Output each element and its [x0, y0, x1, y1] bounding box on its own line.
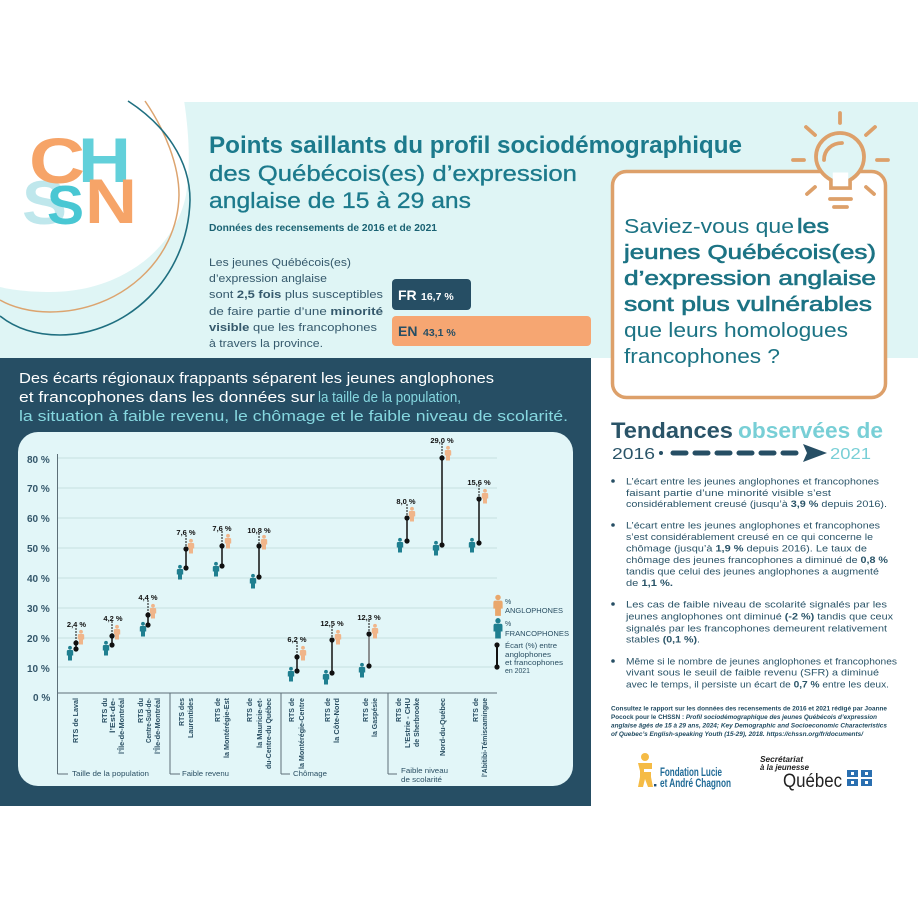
- logo: Secrétariat à la jeunesse Québec: Secrétariat: [760, 754, 804, 764]
- heading: regional gaps: la taille de la population,: [318, 390, 461, 406]
- bullet: low education: stables (0,1 %) .: [626, 634, 700, 646]
- text block: visible minority: visible que les francophones: [209, 322, 378, 334]
- x axis region labels: Laurentides: [186, 698, 195, 738]
- gridlines and y axis: 50 %: [27, 544, 50, 555]
- logo: CHSSN: N: [85, 167, 137, 237]
- bar: FR 16,7 %: FR: [398, 287, 417, 303]
- x axis region labels: RTS de: [245, 698, 254, 722]
- title: anglaise de 15 à 29 ans: [209, 188, 471, 213]
- text block: visible minority: de faire partie d’une minorité: [209, 306, 383, 318]
- legend: %: [505, 599, 511, 606]
- arrow: 2016 to 2021: 2021: [830, 446, 871, 463]
- data: RTS de l'Est-de-l'Île-de-Montréal: [103, 614, 123, 656]
- bullet: low education: jeunes anglophones ont diminué (-2 %) tandis que ceux: [625, 612, 893, 622]
- callout text: que leurs homologues: [624, 320, 848, 342]
- x axis region labels: l’Abitibi-Témiscamingue: [480, 698, 489, 777]
- logo: Secrétariat à la jeunesse Québec: à la jeunesse: [760, 762, 809, 772]
- x axis region labels: du-Centre-du Québec: [264, 698, 273, 769]
- x axis region labels: l’Île-de-Montréal: [153, 698, 162, 754]
- data: RTS de l'Estrie - CHU de Sherbrooke: 8,0 %: [396, 497, 416, 506]
- x axis region labels: la Gaspésie: [370, 698, 379, 737]
- data: RTS de la Côte-Nord: 12,5 %: [320, 619, 344, 628]
- x axis region labels: de Sherbrooke: [412, 698, 421, 747]
- x axis region labels: RTS de: [361, 698, 370, 722]
- gridlines and y axis: 20 %: [27, 634, 50, 645]
- bullet: unemployment: [611, 520, 889, 589]
- arrow: 2016 to 2021: 2016: [612, 446, 655, 463]
- logo: CHSSN: C: [29, 125, 85, 197]
- citation: of Quebec’s English-speaking Youth (15-29), 2018. https://chssn.org/fr/documents/: [611, 731, 864, 738]
- text block: visible minority: d’expression anglaise: [209, 273, 327, 285]
- logo: CHSSN: [22, 125, 137, 238]
- text block: trends bullets: [611, 476, 897, 690]
- heading: regional gaps: [19, 371, 568, 425]
- data: RTS de la Montérégie-Est: 7,6 %: [212, 524, 232, 533]
- bar: EN 43,1 %: EN: [398, 323, 417, 339]
- logo: Fondation Lucie et André Chagnon: [638, 753, 731, 790]
- callout: did you know: [612, 113, 888, 398]
- data: RTS de Laval: [67, 620, 86, 660]
- bullet: low education: Les cas de faible niveau de scolarité signalés par les: [626, 600, 887, 610]
- logo: CHSSN: H: [78, 126, 131, 196]
- bullet: visible minority: L’écart entre les jeunes anglophones et francophones: [626, 476, 879, 488]
- heading: regional gaps: Des écarts régionaux frappants séparent les jeunes anglophones: [19, 371, 494, 387]
- title: des Québécois(es) d’expression: [209, 161, 577, 186]
- x axis region labels: RTS du: [100, 698, 109, 723]
- legend: ANGLOPHONES: [505, 606, 563, 615]
- bar: FR 16,7 %: 16,7 %: [421, 291, 454, 303]
- x axis region labels: L’Estrie - CHU: [403, 698, 412, 748]
- heading: trends: observées de: [738, 418, 883, 443]
- data: RTS des Laurentides: 7,6 %: [176, 528, 196, 537]
- bullet: visible minority: considérablement creusé (jusqu’à 3,9 % depuis 2016).: [626, 499, 887, 510]
- data: RTS du Centre-Sud-de-l'Île-de-Montréal: [138, 593, 158, 636]
- heading: trends: Tendances: [611, 418, 733, 443]
- subtitle: census data: Données des recensements de 2016 et de 2021: [209, 223, 437, 234]
- callout text: [623, 216, 876, 368]
- x axis group labels: Faible revenu: [182, 769, 229, 778]
- x axis region labels: RTS de: [213, 698, 222, 722]
- title: Points saillants du profil sociodémographique: [209, 132, 742, 159]
- data: RTS de la Montérégie-Centre: [287, 635, 307, 682]
- gridlines and y axis: 70 %: [27, 484, 50, 495]
- gridlines and y axis: 40 %: [27, 574, 50, 585]
- panel: regional gaps: [0, 358, 591, 806]
- x axis region labels: RTS du: [136, 698, 145, 723]
- callout text: jeunes Québécois(es): [623, 242, 876, 264]
- legend: en 2021: [505, 668, 530, 675]
- data: RTS de la Mauricie-et-du-Centre-du Québec: [247, 526, 271, 588]
- data: RTS de la Mauricie-et-du-Centre-du Québec: 10,8 %: [247, 526, 271, 535]
- bullet: unemployment: tandis que celui des jeunes anglophones a augmenté: [626, 566, 879, 578]
- x axis region labels: la Montérégie-Centre: [297, 698, 306, 769]
- x axis region labels: la Montérégie-Est: [222, 698, 231, 758]
- legend: FRANCOPHONES: [505, 629, 569, 638]
- heading: regional gaps: et francophones dans les données sur: [19, 390, 315, 406]
- legend: Écart (%) entre: [505, 641, 557, 650]
- data: RTS du Centre-Sud-de-l'Île-de-Montréal: 4,4 %: [138, 593, 158, 602]
- callout text: sont plus vulnérables: [624, 294, 872, 316]
- bullet: unemployment: chômage des jeunes francophones a diminué de 0,8 %: [626, 555, 889, 566]
- text block: visible minority: à travers la province.: [209, 338, 323, 350]
- data: RTS de la Montérégie-Est: [212, 524, 232, 576]
- bullet: low education: signalés par les francophones demeurent relativement: [626, 624, 887, 634]
- x axis region labels: RTS de: [287, 698, 296, 722]
- bullet: unemployment: chômage (jusqu’à 1,9 % depuis 2016). Le taux de: [626, 544, 867, 554]
- bullet: unemployment: de 1,1 %.: [626, 578, 673, 589]
- bullet: low income: Même si le nombre de jeunes anglophones et francophones: [626, 656, 897, 668]
- heading: regional gaps: la situation à faible revenu, le chômage et le faible niveau de scolarité.: [19, 409, 568, 425]
- x axis region labels: Centre-Sud-de-: [144, 698, 153, 743]
- data: RTS des Laurentides: [176, 528, 196, 580]
- bullet: low income: vivant sous le seuil de faible revenu (SFR) a diminué: [626, 668, 879, 678]
- legend: et francophones: [505, 660, 564, 667]
- gridlines and y axis: [27, 454, 497, 774]
- bullet: visible minority: [611, 476, 887, 510]
- text block: visible minority: sont 2,5 fois plus susceptibles: [209, 289, 384, 301]
- data: RTS de l'Estrie - CHU de Sherbrooke: [396, 497, 416, 552]
- legend: %: [505, 621, 511, 628]
- x axis group labels: de scolarité: [401, 775, 442, 784]
- bullet: unemployment: s’est considérablement creusé en ce qui concerne le: [626, 532, 873, 543]
- citation: [611, 706, 887, 738]
- x axis region labels: RTS de: [471, 698, 480, 722]
- callout text: les: [797, 216, 829, 238]
- header background panel: [0, 100, 918, 358]
- data: RTS de la Gaspésie: 12,3 %: [357, 613, 381, 622]
- data: Nord-du-Québec: [430, 436, 454, 556]
- icon: light bulb: [793, 113, 888, 207]
- x axis region labels: RTS des: [177, 698, 186, 726]
- citation: Consultez le rapport sur les données des recensements de 2016 et 2021 rédigé par Joanne: [611, 706, 887, 712]
- gridlines and y axis: 0 %: [33, 693, 50, 704]
- data: RTS de Laval: 2,4 %: [67, 620, 86, 629]
- data: RTS de l'Est-de-l'Île-de-Montréal: 4,2 %: [103, 614, 123, 623]
- text block: visible minority: Les jeunes Québécois(es): [209, 257, 351, 269]
- x axis group labels: Taille de la population: [72, 769, 149, 778]
- x axis region labels: l’Est-de-: [108, 697, 117, 733]
- gridlines and y axis: 10 %: [27, 664, 50, 675]
- legend: anglophones: [505, 652, 552, 659]
- data: RTS de l'Abitibi-Témiscamingue: [467, 478, 491, 552]
- bullet: unemployment: L’écart entre les jeunes anglophones et francophones: [626, 520, 880, 532]
- x axis region labels: la Côte-Nord: [332, 698, 341, 743]
- heading: trends: [611, 418, 883, 443]
- data: Nord-du-Québec: 29,0 %: [430, 436, 454, 445]
- x axis group labels: Chômage: [293, 769, 327, 778]
- x axis region labels: [71, 697, 489, 777]
- bullet: low income: [611, 656, 897, 690]
- bar: EN 43,1 %: [392, 316, 591, 346]
- logo: Secrétariat à la jeunesse Québec: Québec: [783, 771, 842, 792]
- x axis region labels: RTS de: [323, 698, 332, 722]
- x axis group labels: [72, 766, 448, 784]
- gridlines and y axis: 60 %: [27, 514, 50, 525]
- arrow: 2016 to 2021: [612, 444, 871, 463]
- callout text: Saviez-vous que: [624, 216, 794, 238]
- x axis region labels: l’Île-de-Montréal: [117, 698, 126, 754]
- x axis group labels: Faible niveau: [401, 766, 448, 775]
- gridlines and y axis: 30 %: [27, 604, 50, 615]
- logo: Fondation Lucie et André Chagnon: et André Chagnon: [660, 776, 731, 790]
- x axis region labels: la Mauricie-et-: [255, 698, 264, 748]
- legend: [493, 595, 569, 675]
- chart panel: [18, 432, 573, 786]
- citation: Pocock pour le CHSSN : Profil sociodémographique des jeunes Québécois d’expression: [611, 714, 877, 721]
- logo: Secrétariat à la jeunesse Québec: [760, 754, 872, 792]
- bullet: visible minority: faisant partie d’une minorité visible s’est: [626, 488, 831, 499]
- bullet: low education: [611, 600, 893, 646]
- data: RTS de la Montérégie-Centre: 6,2 %: [287, 635, 307, 644]
- x axis region labels: Nord-du-Québec: [438, 698, 447, 756]
- callout text: d’expression anglaise: [624, 268, 876, 290]
- logo: CHSSN: S: [47, 174, 84, 236]
- logo: Fondation Lucie et André Chagnon: Fondation Lucie: [660, 765, 722, 779]
- x axis region labels: RTS de Laval: [71, 698, 80, 743]
- citation: anglaise âgés de 15 à 29 ans, 2024; Key Demographic and Socioeconomic Characteristics: [611, 722, 887, 730]
- bullet: low income: avec le temps, il persiste un écart de 0,7 % entre les deux.: [626, 680, 889, 690]
- data: RTS de la Côte-Nord: [320, 619, 344, 684]
- title: [209, 132, 742, 213]
- bar: FR 16,7 %: [392, 279, 471, 310]
- logo: CHSSN: S: [22, 169, 67, 238]
- x axis region labels: RTS de: [394, 698, 403, 722]
- bar: EN 43,1 %: 43,1 %: [423, 327, 456, 339]
- gridlines and y axis: 80 %: [27, 455, 50, 466]
- data: RTS de l'Abitibi-Témiscamingue: 15,6 %: [467, 478, 491, 487]
- data: RTS de la Gaspésie: [357, 613, 381, 678]
- text block: visible minority: [209, 257, 384, 350]
- callout text: francophones ?: [624, 346, 780, 368]
